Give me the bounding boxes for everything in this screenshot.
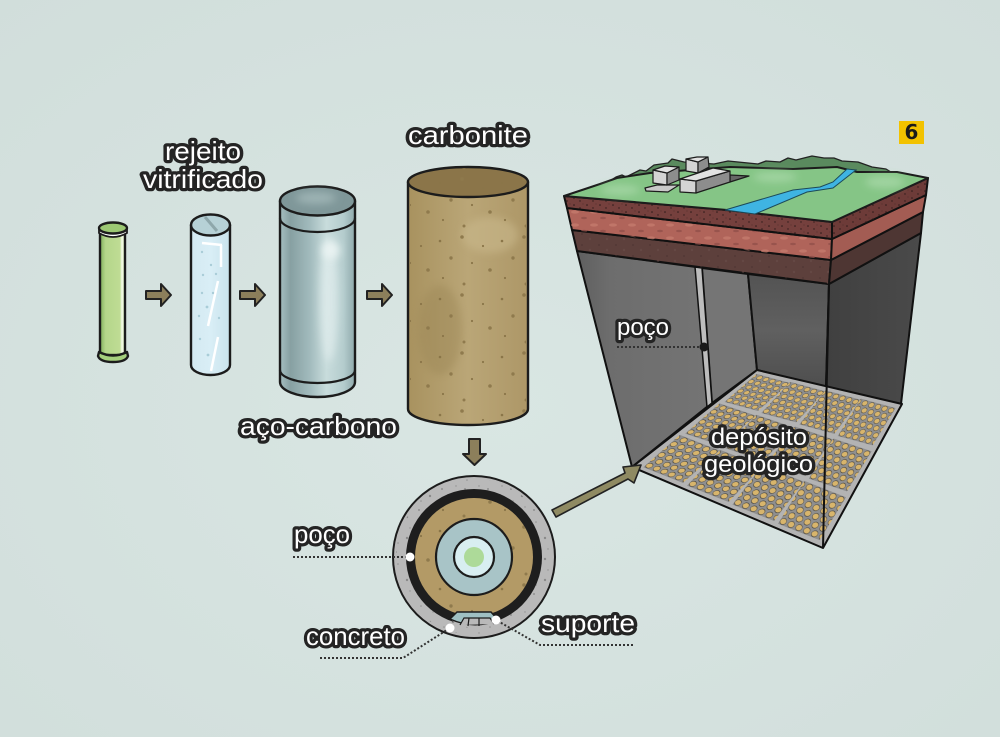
grass top bbox=[564, 167, 928, 222]
arrow: cross-section to repository bbox=[552, 465, 641, 517]
shaft bbox=[695, 267, 712, 407]
label: depósito geológico bbox=[704, 424, 813, 478]
left wall bbox=[577, 251, 708, 467]
soil layers bbox=[564, 178, 928, 284]
floor canister blocks bbox=[643, 374, 896, 540]
carbonite ring bbox=[415, 498, 533, 616]
back wall bbox=[748, 274, 829, 387]
black well lining bbox=[406, 489, 542, 625]
label: depósito geológico: depósito bbox=[711, 424, 807, 451]
right wall bbox=[826, 233, 921, 404]
green waste core bbox=[464, 547, 484, 567]
leader: poço in shaft bbox=[617, 346, 700, 348]
floor bbox=[632, 370, 902, 548]
panel: green waste tube bbox=[98, 222, 128, 362]
label: poço shaft: poço bbox=[617, 314, 669, 341]
shaft marker bbox=[700, 342, 708, 352]
front corner line bbox=[823, 284, 829, 548]
panel: carbon steel canister bbox=[280, 186, 355, 397]
arrow: down to cross-section bbox=[463, 439, 486, 465]
leader: poço bbox=[293, 552, 414, 562]
label: concreto: concreto bbox=[306, 621, 405, 651]
label: rejeito vitrificado: rejeito bbox=[165, 136, 241, 166]
label: suporte: suporte bbox=[541, 608, 635, 638]
label: poço cross-section: poço bbox=[294, 519, 350, 549]
label: carbonite: carbonite bbox=[408, 120, 528, 150]
concrete ring bbox=[393, 476, 555, 638]
badge: number 6: 6 bbox=[905, 120, 918, 144]
support bbox=[450, 612, 498, 628]
panel: geological repository block bbox=[564, 156, 928, 548]
grass highlights bbox=[600, 172, 905, 195]
arrow: glass to steel bbox=[240, 284, 265, 306]
far hills bbox=[592, 156, 908, 192]
arrow: steel to carbonite bbox=[367, 284, 392, 306]
leader: concreto bbox=[320, 624, 454, 658]
river bbox=[725, 169, 856, 214]
label: depósito geológico: geológico bbox=[704, 451, 813, 478]
buildings bbox=[645, 157, 749, 193]
glass core bbox=[454, 537, 494, 577]
arrow: tube to glass bbox=[146, 284, 171, 306]
leader: suporte bbox=[492, 616, 633, 645]
label: rejeito vitrificado: vitrificado bbox=[143, 164, 263, 194]
inner wall bbox=[702, 268, 757, 403]
label: rejeito vitrificado bbox=[143, 136, 263, 194]
panel: vitrified glass cylinder bbox=[191, 214, 230, 375]
label: aço-carbono: aço-carbono bbox=[240, 411, 397, 441]
panel: well cross-section bbox=[393, 476, 555, 638]
panel: carbonite cylinder bbox=[408, 167, 528, 425]
steel ring bbox=[436, 519, 512, 595]
badge: number 6 bbox=[899, 120, 924, 144]
